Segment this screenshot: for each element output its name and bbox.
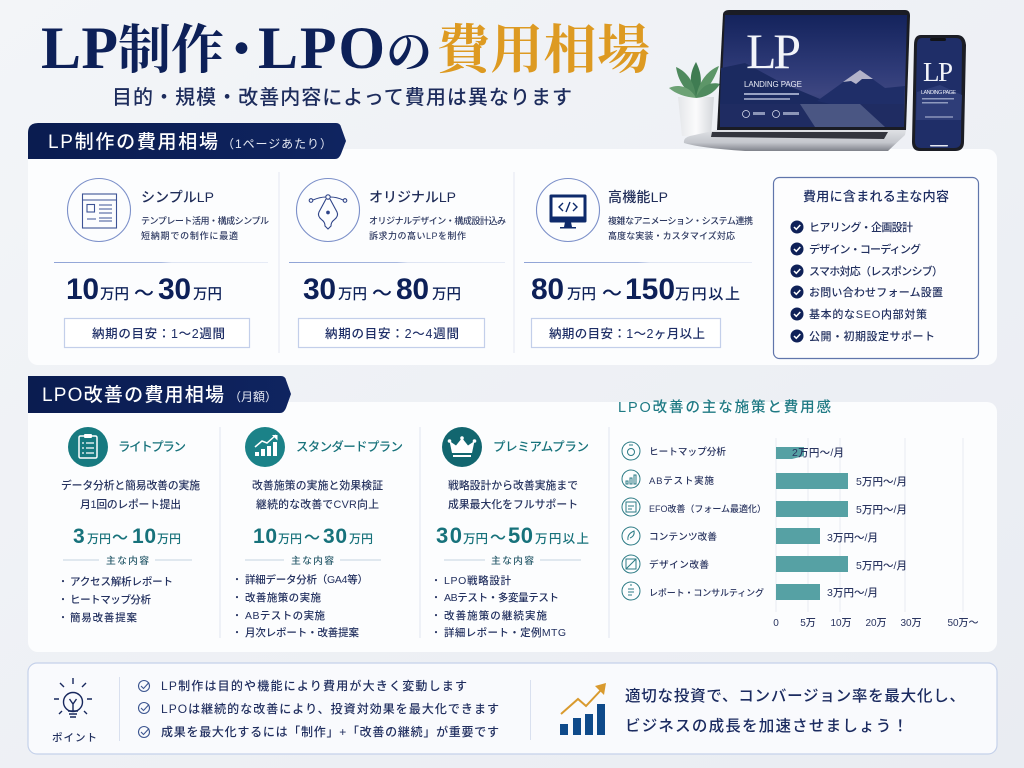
included list: 基本的なSEO内部対策 <box>809 307 927 321</box>
heading ribbon: LPO improvement: LPO改善の費用相場 <box>42 384 224 406</box>
plan list: ・ <box>232 611 242 622</box>
point text: LPOは継続的な改善により、投資対効果を最大化できます <box>161 701 499 716</box>
price: 10 <box>66 273 99 306</box>
row labels: EFO改善（フォーム最適化） <box>649 503 766 514</box>
price: 30 <box>158 273 191 306</box>
delivery box: 納期の目安：1～2週間 <box>92 326 225 341</box>
point text: LP制作は目的や機能により費用が大きく変動します <box>161 678 467 693</box>
card: high-function LP: 高度な実装・カスタマイズ対応 <box>608 230 735 241</box>
title: LPO <box>258 15 385 81</box>
heading ribbon: LPO improvement <box>28 376 291 413</box>
axis labels: 20万 <box>865 618 887 629</box>
price: 万円 <box>100 287 129 303</box>
plan list: 改善施策の継続実施 <box>444 609 548 622</box>
plan: premium: 成果最大化をフルサポート <box>448 497 578 511</box>
icon: clipboard <box>68 427 108 467</box>
icon: potted plant <box>669 62 720 136</box>
plan list: ・ <box>232 628 242 639</box>
icon: crown <box>442 427 482 467</box>
price: 万円以上 <box>675 286 740 303</box>
price: ～ <box>372 283 392 305</box>
plan list <box>431 574 566 639</box>
card description: 複雑なアニメーション・システム連携 <box>608 215 753 226</box>
plan price: 10 <box>132 525 156 548</box>
plan list: ・ <box>431 576 441 587</box>
card: original LP: 訴求力の高いLPを制作 <box>369 230 466 241</box>
plan list: 詳細レポート・定例MTG <box>444 626 566 639</box>
plan price: 万円 <box>157 532 181 546</box>
price: 80 <box>396 273 429 306</box>
delivery box <box>64 318 250 348</box>
panel: key points <box>28 663 997 754</box>
plan title: スタンダードプラン <box>296 439 403 454</box>
chart: LPO measures and cost <box>618 398 979 629</box>
price: 万円 <box>432 287 461 303</box>
point text <box>161 678 499 739</box>
delivery box <box>532 318 720 348</box>
bar values <box>792 447 907 599</box>
plan: light: 月1回のレポート提出 <box>80 497 181 511</box>
plan description: 改善施策の実施と効果検証 <box>252 478 383 492</box>
plan price: ～ <box>304 530 320 547</box>
price: ～ <box>134 283 154 305</box>
plan list <box>58 575 173 624</box>
bar values: 3万円～/月 <box>827 587 878 599</box>
price: 150 <box>625 273 675 306</box>
included list: お問い合わせフォーム設置 <box>809 285 943 299</box>
delivery box: 納期の目安：2～4週間 <box>325 326 459 341</box>
plan list: ・ <box>431 611 441 622</box>
axis labels: 0 <box>773 618 779 629</box>
icon: smartphone: LANDING PAGE <box>921 90 956 96</box>
point label: ポイント <box>52 732 97 744</box>
plan: premium <box>431 427 589 639</box>
axis labels: 5万 <box>800 618 816 629</box>
price: ～ <box>602 283 622 305</box>
plan: standard: 継続的な改善でCVR向上 <box>256 497 379 511</box>
title: LP <box>41 15 118 81</box>
axis labels: 50万～ <box>947 618 979 629</box>
axis labels: 30万 <box>900 618 922 629</box>
illustration: plant, laptop and phone <box>669 10 966 151</box>
card description: テンプレート活用・構成シンプル <box>141 215 269 226</box>
icon: monitor with code <box>536 178 600 242</box>
plan price: 30 <box>436 523 462 548</box>
card title: 高機能LP <box>608 189 668 205</box>
card: simple LP: 短納期での制作に最適 <box>141 230 238 241</box>
card description: オリジナルデザイン・構成設計込み <box>369 215 506 226</box>
card title: シンプルLP <box>141 189 214 205</box>
price: 万円 <box>567 287 596 303</box>
point text: 成果を最大化するには「制作」+「改善の継続」が重要です <box>161 724 499 739</box>
row labels: コンテンツ改善 <box>649 531 717 543</box>
bar values: 5万円～/月 <box>856 560 907 572</box>
row labels: レポート・コンサルティング <box>649 587 764 598</box>
icon: template page <box>68 178 130 242</box>
icon: laptop: LP <box>746 23 801 79</box>
plan price: 万円 <box>349 532 373 546</box>
plan list: ヒートマップ分析 <box>70 593 152 606</box>
included list <box>790 220 943 343</box>
plan price: ～ <box>490 530 506 547</box>
delivery box: 納期の目安：1～2ヶ月以上 <box>549 326 705 341</box>
price: 万円 <box>338 287 367 303</box>
plan price <box>73 525 181 548</box>
plan list: ・ <box>431 628 441 639</box>
subtitle: 目的・規模・改善内容によって費用は異なります <box>112 86 572 109</box>
row labels: ヒートマップ分析 <box>649 446 726 458</box>
icon: laptop <box>684 10 910 151</box>
plan description: データ分析と簡易改善の実施 <box>61 478 200 492</box>
row labels: ABテスト実施 <box>649 475 714 487</box>
plan price: 万円 <box>278 532 302 546</box>
plan list: LPO戦略設計 <box>444 574 512 587</box>
panel: LPO improvement costs <box>28 398 997 652</box>
plan price: 10 <box>253 525 277 548</box>
bar values: 3万円～/月 <box>827 532 878 544</box>
plan description: 戦略設計から改善実施まで <box>448 478 578 492</box>
price: 30 <box>303 273 336 306</box>
icon: rising chart <box>245 427 285 467</box>
delivery box <box>298 318 484 348</box>
closing message <box>625 687 965 735</box>
plan: standard <box>232 427 403 639</box>
plan price <box>436 523 589 548</box>
plan list: ・ <box>58 613 68 624</box>
price: 80 <box>531 273 564 306</box>
main contents label <box>444 554 581 567</box>
heading ribbon: LP production: （1ページあたり） <box>222 137 332 151</box>
icon: laptop: LANDING PAGE <box>744 80 802 89</box>
plan list: 簡易改善提案 <box>70 611 138 624</box>
closing message: ビジネスの成長を加速させましょう！ <box>625 717 908 735</box>
plan title: ライトプラン <box>118 440 186 454</box>
chart title: LPO改善の主な施策と費用感 <box>618 398 832 416</box>
bar values: 2万円～/月 <box>792 447 844 459</box>
plan list <box>232 573 368 639</box>
row icons <box>622 442 640 600</box>
plan list: ABテスト・多変量テスト <box>444 591 559 604</box>
main contents label: 主な内容 <box>291 554 334 567</box>
icon: smartphone: LP <box>923 57 953 87</box>
card: simple LP <box>54 178 269 348</box>
title <box>41 15 650 81</box>
bars <box>776 447 848 600</box>
axis labels <box>773 618 979 629</box>
plan price: 30 <box>323 525 347 548</box>
icon: pen tool <box>296 178 360 242</box>
bar values: 5万円～/月 <box>856 476 907 488</box>
plan list: 改善施策の実施 <box>245 591 322 604</box>
icon: light bulb <box>54 678 92 717</box>
plan list: ・ <box>232 575 242 586</box>
card: original LP <box>289 178 506 348</box>
main contents label <box>63 554 192 567</box>
plan title: プレミアムプラン <box>493 440 589 454</box>
title: ・ <box>215 22 268 80</box>
title: 費用相場 <box>437 21 650 80</box>
plan list: 月次レポート・改善提案 <box>245 626 360 639</box>
vertical dividers <box>220 427 609 638</box>
main contents label: 主な内容 <box>491 554 534 567</box>
included list: スマホ対応（レスポンシブ） <box>809 264 943 278</box>
main contents label: 主な内容 <box>106 554 149 567</box>
heading ribbon: LP production <box>28 123 346 159</box>
row labels: デザイン改善 <box>649 559 709 571</box>
plan price: ～ <box>112 530 128 547</box>
plan list: ・ <box>431 593 441 604</box>
plan list: ABテストの実施 <box>245 609 326 622</box>
plan list: ・ <box>58 595 68 606</box>
plan: light <box>58 427 200 624</box>
plan price: 万円 <box>463 532 488 546</box>
plan list: ・ <box>232 593 242 604</box>
main contents label <box>245 554 381 567</box>
plan price: 万円以上 <box>535 532 589 546</box>
included list: デザイン・コーディング <box>809 242 921 256</box>
icon: growth chart with arrow <box>560 683 606 735</box>
included heading: 費用に含まれる主な内容 <box>803 189 949 204</box>
vertical dividers <box>279 172 514 353</box>
heading ribbon: LPO improvement: （月額） <box>229 390 277 404</box>
point checks <box>138 680 150 738</box>
included list: ヒアリング・企画設計 <box>809 220 913 234</box>
plan price: 50 <box>508 523 533 548</box>
bar values: 5万円～/月 <box>856 504 907 516</box>
panel: LP production costs <box>28 149 997 365</box>
closing message: 適切な投資で、コンバージョン率を最大化し、 <box>625 687 965 705</box>
plan list: ・ <box>58 577 68 588</box>
price <box>531 273 740 306</box>
price: 万円 <box>193 287 222 303</box>
plan price <box>253 525 373 548</box>
heading ribbon: LP production: LP制作の費用相場 <box>48 131 218 153</box>
row labels <box>649 446 766 598</box>
title: の <box>386 27 432 78</box>
icon: smartphone <box>912 35 966 151</box>
plan price: 万円 <box>87 532 111 546</box>
included list: 公開・初期設定サポート <box>809 329 935 343</box>
price <box>303 273 461 306</box>
card title: オリジナルLP <box>369 189 456 205</box>
card: high-function LP <box>524 178 753 348</box>
price <box>66 273 222 306</box>
title: 制作 <box>118 22 224 80</box>
plan list: 詳細データ分析（GA4等） <box>245 573 368 586</box>
panel: included items <box>774 178 978 358</box>
plan price: 3 <box>73 525 85 548</box>
plan list: アクセス解析レポート <box>70 575 173 588</box>
axis labels: 10万 <box>830 618 852 629</box>
